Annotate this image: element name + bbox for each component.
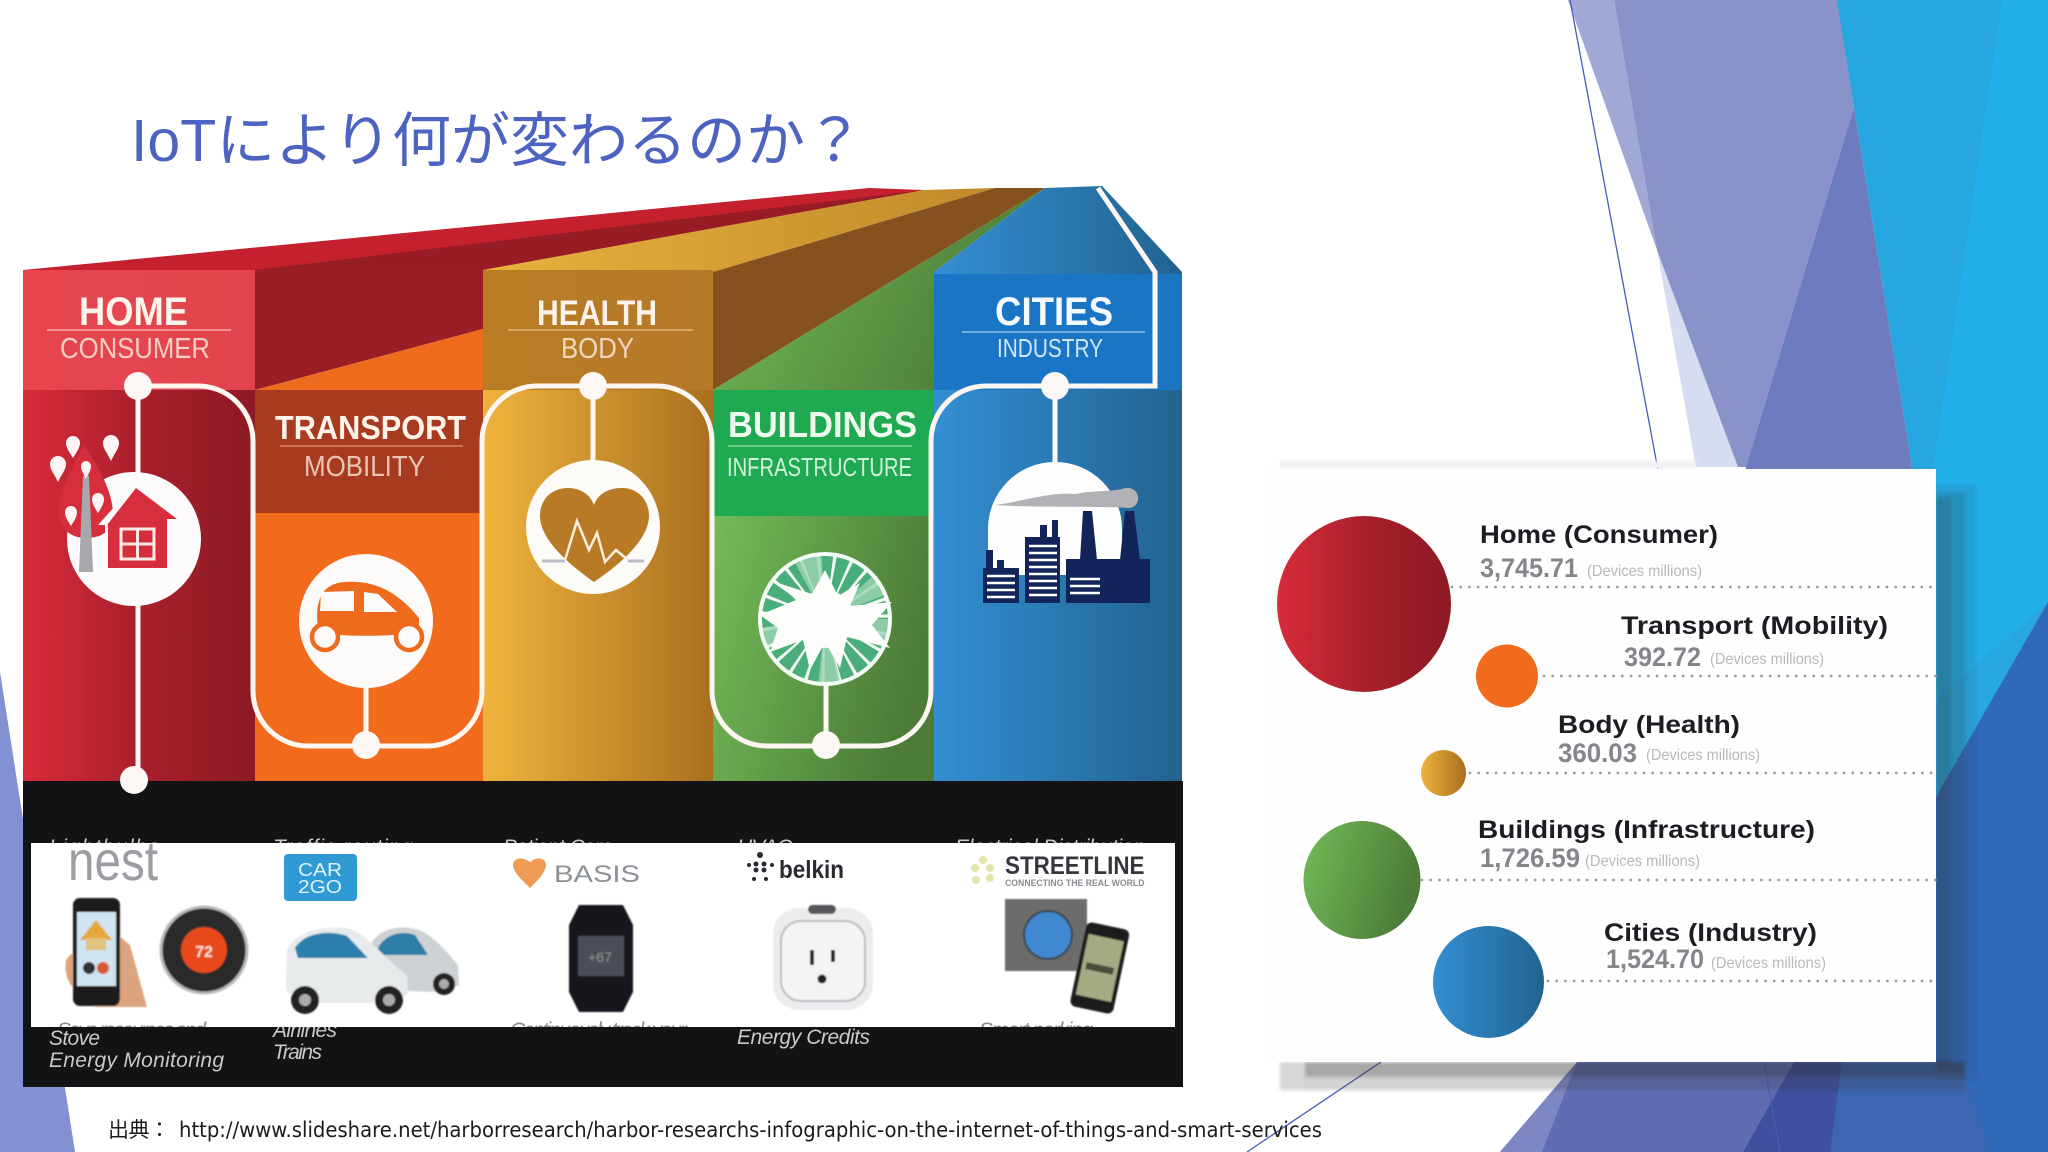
streetline sensor photo and phone xyxy=(1005,899,1130,1015)
brand: basis xyxy=(513,858,640,1012)
brand: car2go: CAR xyxy=(298,860,342,880)
heading: home: HOME xyxy=(79,290,188,334)
column: health xyxy=(483,270,713,781)
icon: home with tree xyxy=(50,435,201,606)
bubble: buildings: Buildings (Infrastructure) xyxy=(1478,816,1815,844)
black strip with use-case text: Traffic routing xyxy=(273,836,413,859)
heading: buildings xyxy=(727,404,917,482)
heading: health: HEALTH xyxy=(537,294,657,333)
bubble: buildings xyxy=(1304,816,1936,939)
nest thermostat: 72 xyxy=(195,944,213,961)
title: IoTにより何が変わるのか？ xyxy=(131,108,864,174)
brand: nest xyxy=(65,829,247,1007)
icon: car xyxy=(299,554,433,688)
belkin smart plug xyxy=(773,905,873,1010)
icon: city skyline with factory xyxy=(983,462,1150,603)
heading: cities: CITIES xyxy=(995,290,1113,334)
heading: home: CONSUMER xyxy=(60,333,210,365)
source citation: http://www.slideshare.net/harborresearch/harbor-researchs-infographic-on-the-internet-of-things-and-smart-services xyxy=(179,1118,1322,1142)
brand: streetline xyxy=(971,852,1145,1015)
column: buildings xyxy=(713,390,934,781)
white panel: product examples xyxy=(31,843,1175,1027)
clipped captions at lower edge of white panel: Continuously track your xyxy=(510,1019,688,1042)
bubble: buildings: (Devices millions) xyxy=(1585,853,1700,870)
heading: health: BODY xyxy=(561,333,634,365)
bubble: cities xyxy=(1433,919,1936,1038)
brand: streetline: STREETLINE xyxy=(1005,852,1144,880)
chart panel: devices by sector xyxy=(1265,469,1936,1062)
heading: buildings: INFRASTRUCTURE xyxy=(727,452,912,482)
bubble: home: 3,745.71 xyxy=(1480,553,1578,583)
brand: streetline: CONNECTING THE REAL WORLD xyxy=(1005,878,1145,888)
bubble: cities: (Devices millions) xyxy=(1711,955,1826,972)
clipped captions at lower edge of white panel xyxy=(60,1022,1093,1027)
icon: heart with pulse xyxy=(526,460,660,594)
heading: cities: INDUSTRY xyxy=(997,333,1103,363)
background: decorative facets top right xyxy=(1568,0,2048,1062)
source citation: 出典： xyxy=(108,1114,170,1144)
bubble: transport xyxy=(1476,612,1936,708)
column: cities xyxy=(934,274,1182,781)
brand: belkin xyxy=(747,852,873,1010)
bubble: body: Body (Health) xyxy=(1558,711,1740,739)
black strip with use-case text: Stove xyxy=(49,1027,100,1050)
brand: car2go xyxy=(284,854,459,1014)
car2go cars xyxy=(286,928,459,1014)
heading: health xyxy=(508,294,693,365)
icon: radial building plan xyxy=(758,552,892,686)
brand: belkin: belkin xyxy=(779,856,844,884)
chart panel shadow xyxy=(1280,461,1976,1090)
brand: car2go: 2GO xyxy=(298,877,342,897)
black strip with use-case text: Energy Monitoring xyxy=(49,1049,224,1072)
bubble: cities: Cities (Industry) xyxy=(1604,919,1817,947)
nest thermostat xyxy=(161,907,247,993)
brand: basis: BASIS xyxy=(554,861,640,888)
column: home xyxy=(23,270,255,781)
bubble: transport: Transport (Mobility) xyxy=(1621,612,1888,640)
clipped captions at lower edge of white panel: Save resources and xyxy=(57,1019,207,1042)
bubble: buildings: 1,726.59 xyxy=(1480,843,1580,873)
heading: transport: TRANSPORT xyxy=(275,409,466,446)
nest phone in hand xyxy=(65,898,147,1007)
heading: buildings: BUILDINGS xyxy=(728,404,917,445)
bubble: home: (Devices millions) xyxy=(1587,563,1702,580)
infographic panel: five IoT sectors xyxy=(23,186,1976,1144)
clipped captions at lower edge of white panel: Smart parking xyxy=(979,1019,1093,1042)
black strip with use-case text: Trains xyxy=(273,1041,322,1064)
column: transport xyxy=(255,390,483,781)
bubble: transport: 392.72 xyxy=(1624,642,1701,672)
bubble: home: Home (Consumer) xyxy=(1480,521,1718,549)
black strip with use-case text xyxy=(23,781,1183,1087)
background: decorative facets bottom right xyxy=(1500,602,2048,1152)
bubble: transport: (Devices millions) xyxy=(1710,651,1824,668)
heading: home xyxy=(47,290,231,365)
black strip with use-case text: Airlines xyxy=(271,1019,338,1042)
black strip with use-case text: HVAC xyxy=(737,836,793,859)
brand: nest: nest xyxy=(68,829,158,892)
black strip with use-case text: Energy Credits xyxy=(737,1026,870,1049)
heading: transport: MOBILITY xyxy=(304,451,425,483)
heading: cities xyxy=(962,290,1145,363)
black strip with use-case text: Electrical Distribution xyxy=(955,836,1145,859)
black strip with use-case text: Patient Care xyxy=(503,836,613,859)
background: decorative facet bottom left xyxy=(0,672,75,1152)
bubble: cities: 1,524.70 xyxy=(1606,944,1704,974)
roof: perspective bands xyxy=(23,186,1182,390)
connector line with nodes xyxy=(120,188,1155,794)
bubble: home xyxy=(1277,516,1936,692)
heading: transport xyxy=(275,409,466,483)
bubble: body xyxy=(1421,711,1936,796)
bubble: body: 360.03 xyxy=(1558,738,1637,768)
black strip with use-case text: Lightbulbs xyxy=(49,836,160,859)
basis watch xyxy=(569,905,633,1012)
decorative thin lines xyxy=(1247,0,1780,1152)
bubble: body: (Devices millions) xyxy=(1646,747,1760,764)
basis watch: +67 xyxy=(588,949,612,965)
